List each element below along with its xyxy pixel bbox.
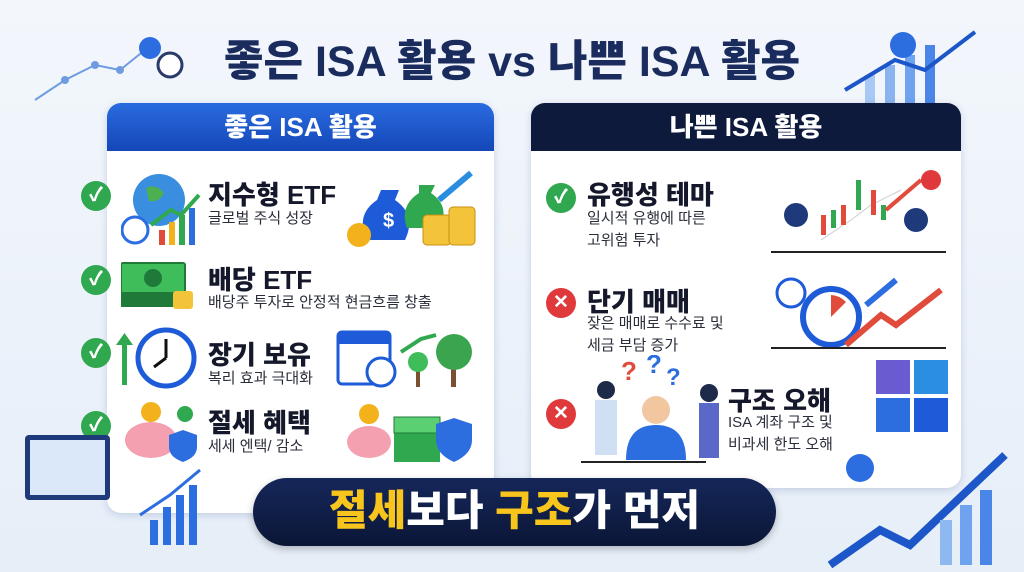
decoration: top-right chart	[844, 30, 976, 103]
decoration: top-left chart	[34, 37, 184, 101]
item: 장기 보유: ✓	[89, 342, 103, 363]
item: 단기 매매	[546, 278, 946, 354]
banner: conclusion: 절세보다 구조가 먼저	[329, 487, 700, 534]
item: 절세 혜택: 세세 엔택/ 감소	[208, 438, 303, 455]
item: 절세 혜택: 절세 혜택	[208, 408, 311, 438]
heading: good: 좋은 ISA 활용	[224, 112, 377, 142]
item: 유행성 테마: ✓	[554, 187, 568, 208]
item: 단기 매매: 세금 부담 증가	[587, 337, 678, 354]
panel: good ISA	[107, 103, 494, 513]
item: 장기 보유: 장기 보유	[208, 340, 311, 370]
item: 유행성 테마: 일시적 유행에 따른	[587, 210, 706, 227]
item: 단기 매매: ✕	[553, 292, 569, 313]
decoration: bottom-left monitor	[25, 435, 201, 545]
banner: conclusion	[253, 478, 776, 546]
item: 배당 ETF	[81, 262, 432, 311]
item: 배당 ETF: ✓	[89, 269, 103, 290]
item: 구조 오해: ?	[666, 364, 681, 391]
decoration: bottom-right chart	[828, 452, 1008, 568]
heading: bad: 나쁜 ISA 활용	[670, 112, 822, 142]
item: 구조 오해: ?	[621, 356, 637, 386]
item: 단기 매매: 단기 매매	[587, 287, 690, 317]
heading: good	[107, 103, 494, 151]
item: 배당 ETF: 배당주 투자로 안정적 현금흐름 창출	[208, 294, 432, 311]
item: 유행성 테마: 유행성 테마	[587, 180, 714, 210]
item: 지수형 ETF: 글로벌 주식 성장	[208, 210, 313, 227]
item: 구조 오해	[546, 355, 948, 463]
item: 유행성 테마: 고위험 투자	[587, 232, 660, 249]
item: 구조 오해: 구조 오해	[728, 386, 831, 416]
item: 배당 ETF: 배당 ETF	[208, 265, 312, 295]
item: 구조 오해: 비과세 한도 오해	[728, 436, 833, 453]
item: 장기 보유	[81, 328, 472, 388]
item: 지수형 ETF	[81, 170, 476, 247]
panel: bad ISA	[531, 103, 961, 488]
item: 단기 매매: 잦은 매매로 수수료 및	[587, 315, 724, 332]
item: 지수형 ETF: ✓	[89, 185, 103, 206]
item: 유행성 테마	[546, 170, 946, 253]
item: 장기 보유: 복리 효과 극대화	[208, 370, 313, 387]
title: 좋은 ISA 활용 vs 나쁜 ISA 활용	[224, 38, 800, 86]
item: 지수형 ETF: 지수형 ETF	[208, 180, 336, 210]
item: 구조 오해: ISA 계좌 구조 및	[728, 414, 833, 431]
item: 절세 혜택	[81, 402, 472, 462]
item: 절세 혜택: ✓	[89, 415, 103, 436]
item: 지수형 ETF: $	[383, 210, 394, 232]
heading: bad	[531, 103, 961, 151]
item: 구조 오해: ✕	[553, 403, 569, 424]
